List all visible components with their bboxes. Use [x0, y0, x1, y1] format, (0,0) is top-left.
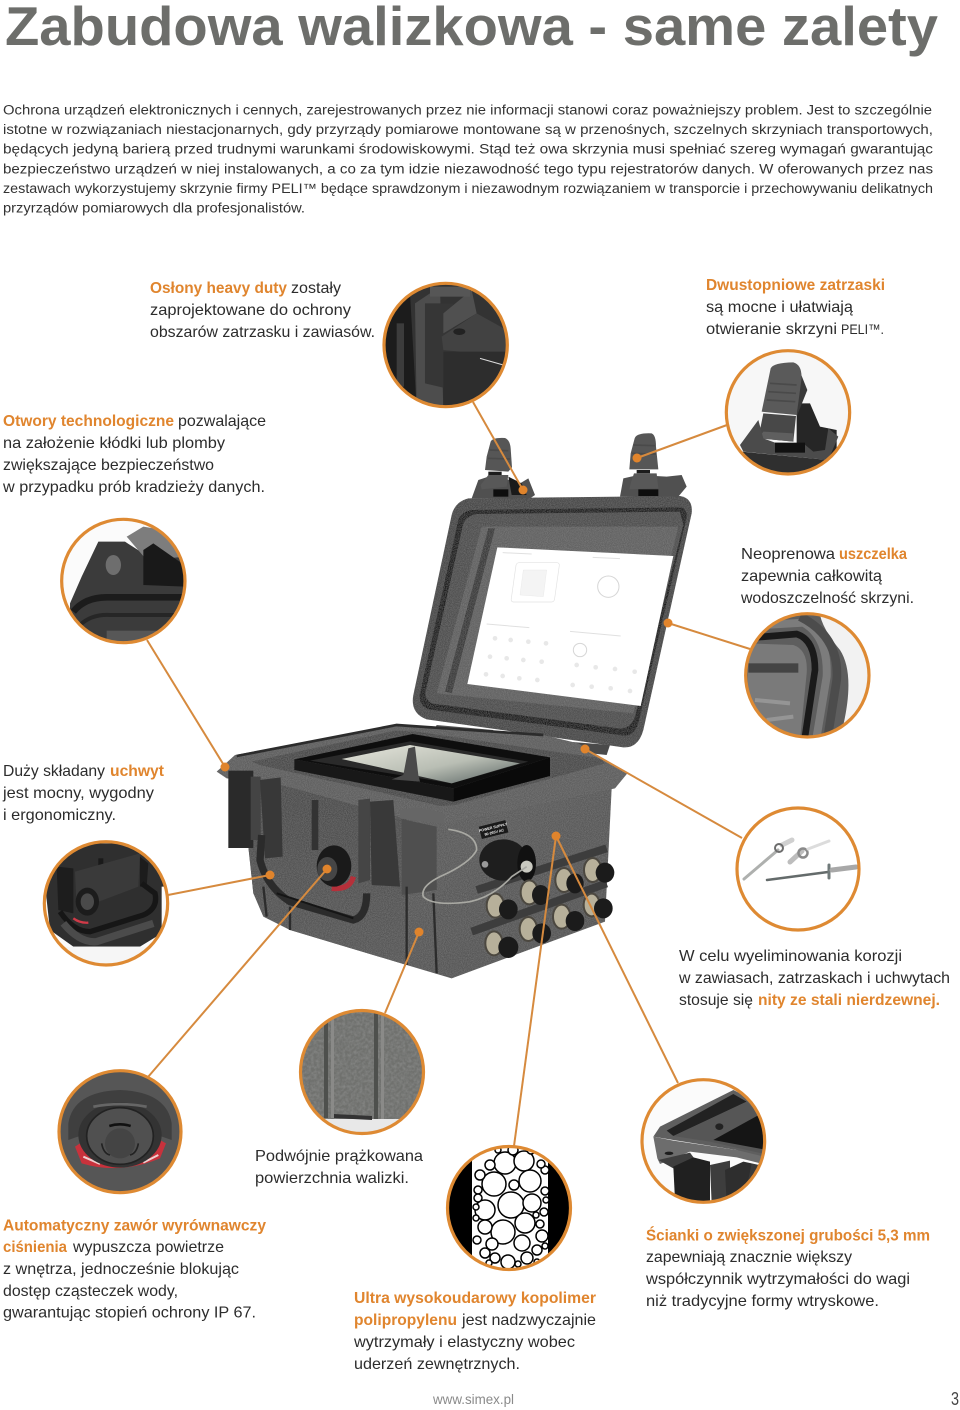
- leader lines and anchor dots: [147, 402, 750, 1146]
- pressure valve on case: [317, 845, 353, 889]
- detail photo: pressure valve: [57, 1068, 183, 1195]
- detail photo: thick walls: [640, 1078, 767, 1205]
- callout text: polypropylene copolymer: jest nadzwyczajnie: [461, 1312, 596, 1329]
- detail photo: padlock hole: [60, 517, 187, 647]
- callout text: handle: i ergonomiczny.: [3, 807, 116, 824]
- intro text block: [3, 102, 933, 216]
- callout text: stainless rivets: w zawiasach, zatrzaskach i uchwytach: [678, 970, 950, 987]
- power connector: [478, 820, 536, 882]
- callout text: technological holes: [2, 413, 266, 496]
- callout text: pressure valve: Automatyczny zawór wyrównawczy: [3, 1218, 266, 1234]
- callout text: stainless rivets: stosuje się: [679, 992, 753, 1009]
- callout text: pressure valve: gwarantując stopień ochrony IP 67.: [3, 1304, 256, 1322]
- display tray: [294, 734, 550, 802]
- callout text: polypropylene copolymer: polipropylenu: [354, 1312, 457, 1329]
- callout text: handle: Duży składany: [3, 763, 105, 780]
- detail photo: double ribbed surface: [298, 1008, 426, 1139]
- callout text: heavy duty guards: zaprojektowane do ochrony: [150, 302, 351, 319]
- intro text block: zestawach wykorzystujemy skrzynie firmy PELI™ będące sprawdzonym i niezawodnym rozwiązaniem w transporcie i przechowywaniu delikatnych: [3, 181, 933, 196]
- footer website: www.simex.pl: [432, 1391, 514, 1407]
- callout text: two-stage latches: są mocne i ułatwiają: [706, 299, 853, 316]
- handle side ribs: [228, 771, 445, 973]
- callout text: pressure valve: [3, 1218, 266, 1322]
- detail photo: heavy duty guard: [380, 280, 513, 413]
- callout text: double ribbed surface: [255, 1148, 423, 1187]
- intro text block: istotne w rozwiązaniach niestacjonarnych, gdy przyrządy pomiarowe montowane są w przenośnych, szczelnych skrzyniach transportowych,: [3, 122, 933, 137]
- callout text: handle: [2, 763, 165, 824]
- callout text: handle: jest mocny, wygodny: [2, 785, 154, 802]
- callout text: two-stage latches: PELI™.: [841, 321, 884, 337]
- callout text: heavy duty guards: obszarów zatrzasku i zawiasów.: [150, 324, 375, 341]
- callout text: gasket: zapewnia całkowitą: [741, 568, 882, 585]
- right latch: [620, 433, 687, 497]
- detail photo: rivets: [737, 808, 859, 930]
- intro text block: będących jedyną barierą przed trudnymi warunkami środowiskowymi. Stąd też owa skrzynia musi spełniać szereg wymagań gwarantując: [3, 142, 933, 157]
- printed sheet inside lid: [467, 547, 673, 706]
- callout text: thick walls: Ścianki o zwiększonej grubości 5,3 mm: [646, 1226, 930, 1244]
- callout text: stainless rivets: nity ze stali nierdzewnej.: [758, 992, 940, 1009]
- callout text: technological holes: zwiększające bezpieczeństwo: [3, 457, 214, 474]
- intro text block: Ochrona urządzeń elektronicznych i cennych, zarejestrowanych przez nie informacji stanowi coraz poważniejszy problem. Jest to szczególnie: [3, 102, 932, 117]
- callout text: thick walls: niż tradycyjne formy wtryskowe.: [646, 1293, 879, 1310]
- callout text: polypropylene copolymer: [353, 1290, 596, 1373]
- callout text: two-stage latches: otwieranie skrzyni: [706, 321, 837, 338]
- callout text: heavy duty guards: Osłony heavy duty: [150, 280, 287, 297]
- callout text: technological holes: Otwory technologiczne: [3, 413, 174, 430]
- callout text: gasket: [740, 546, 914, 607]
- earthing cable: [423, 829, 527, 903]
- callout text: thick walls: współczynnik wytrzymałości do wagi: [645, 1271, 910, 1288]
- callout text: polypropylene copolymer: Ultra wysokoudarowy kopolimer: [354, 1290, 596, 1307]
- case lid: [413, 433, 692, 755]
- left latch: [472, 438, 535, 498]
- callout text: technological holes: na założenie kłódki lub plomby: [3, 435, 225, 452]
- detail photo: latch: [723, 347, 857, 480]
- callout text: handle: uchwyt: [110, 763, 165, 780]
- callout text: double ribbed surface: Podwójnie prążkowana: [255, 1148, 423, 1165]
- callout text: pressure valve: dostęp cząsteczek wody,: [3, 1283, 178, 1300]
- callout text: two-stage latches: Dwustopniowe zatrzaski: [706, 277, 885, 294]
- callout text: stainless rivets: [678, 948, 950, 1009]
- callout text: technological holes: pozwalające: [178, 413, 266, 430]
- intro text block: przyrządów pomiarowych dla profesjonalistów.: [3, 201, 305, 216]
- callout text: heavy duty guards: zostały: [291, 280, 341, 297]
- callout text: double ribbed surface: powierzchnia walizki.: [255, 1170, 409, 1187]
- connector strips: [472, 848, 607, 932]
- connectors: [485, 858, 614, 958]
- intro text block: bezpieczeństwo urządzeń w niej instalowanych, a co za tym idzie niezawodność tego typu rejestratorów danych. W oferowanych przez nas: [3, 161, 933, 176]
- callout text: gasket: uszczelka: [839, 546, 907, 563]
- callout text: pressure valve: wypuszcza powietrze: [72, 1239, 224, 1256]
- callout text: polypropylene copolymer: wytrzymały i elastyczny wobec: [353, 1334, 575, 1351]
- callout text: pressure valve: z wnętrza, jednocześnie blokując: [3, 1261, 239, 1278]
- detail photo: folding handle: [40, 837, 173, 970]
- callout text: gasket: Neoprenowa: [741, 546, 835, 563]
- callout text: pressure valve: ciśnienia: [3, 1239, 67, 1256]
- callout text: gasket: wodoszczelność skrzyni.: [740, 590, 914, 607]
- detail photo: gasket: [743, 610, 873, 743]
- callout text: polypropylene copolymer: uderzeń zewnętrznych.: [354, 1356, 520, 1373]
- callout text: heavy duty guards: [150, 280, 375, 341]
- power connector: POWER SUPPLY: [478, 822, 508, 833]
- callout text: technological holes: w przypadku prób kradzieży danych.: [2, 479, 265, 496]
- callout text: two-stage latches: [706, 277, 885, 338]
- callout text: thick walls: zapewniają znacznie większy: [646, 1249, 852, 1266]
- power connector: 90-265V AC: [484, 828, 505, 837]
- callout text: thick walls: [645, 1226, 930, 1310]
- case base: [217, 725, 627, 978]
- callout text: stainless rivets: W celu wyeliminowania korozji: [679, 948, 902, 965]
- detail diagram: polymer cell structure: [445, 1145, 575, 1275]
